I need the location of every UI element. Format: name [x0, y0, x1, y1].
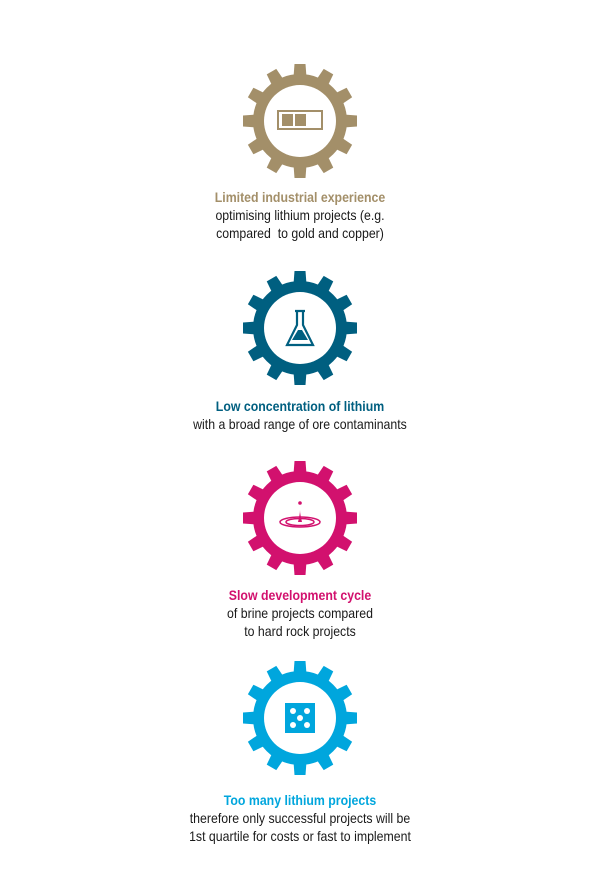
icon: gear drop [243, 461, 357, 575]
text: low concentration: with a broad range of ore contaminants [193, 416, 407, 432]
icon: gear battery [243, 64, 357, 178]
text: limited experience: compared to gold and copper) [216, 225, 384, 241]
text: too many projects [189, 792, 411, 844]
text: limited experience [215, 189, 385, 241]
text: low concentration [193, 398, 407, 432]
icon: gear flask [243, 271, 357, 385]
text: slow development: Slow development cycle [229, 587, 371, 603]
text: slow development: to hard rock projects [244, 623, 356, 639]
text: too many projects: therefore only successful projects will be [190, 810, 410, 826]
text: slow development [227, 587, 373, 639]
text: too many projects: 1st quartile for costs or fast to implement [189, 828, 411, 844]
text: low concentration: Low concentration of lithium [216, 398, 384, 414]
text: limited experience: Limited industrial experience [215, 189, 385, 205]
text: limited experience: optimising lithium projects (e.g. [215, 207, 385, 223]
text: slow development: of brine projects compared [227, 605, 373, 621]
text: too many projects: Too many lithium projects [224, 792, 376, 808]
icon: gear dice [243, 661, 357, 775]
